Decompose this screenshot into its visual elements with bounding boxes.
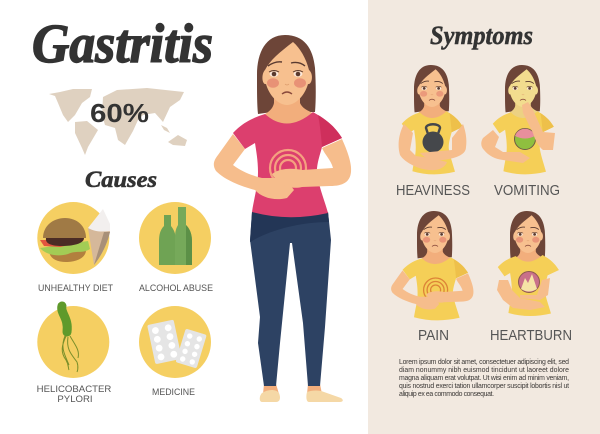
text block: lorem ipsum: quis nostrud exerci tation ullamcorper suscipit lobortis nisl ut xyxy=(399,383,569,390)
head xyxy=(257,35,316,126)
label: helicobacter pylori: PYLORI xyxy=(57,394,93,405)
stomach pain rings xyxy=(270,150,306,186)
heading: causes: Causes xyxy=(85,167,157,192)
cause: unhealthy diet xyxy=(37,202,110,274)
label: heaviness: HEAVINESS xyxy=(396,182,470,199)
title: Gastritis xyxy=(32,13,213,74)
label: pain: PAIN xyxy=(418,327,449,344)
symptom figure: vomiting xyxy=(481,65,555,174)
text block: lorem ipsum: magna aliquam erat volutpat. Ut wisi enim ad minim veniam, xyxy=(399,375,569,382)
cause: medicine xyxy=(139,306,211,378)
world map with 60% statistic: 60% xyxy=(90,98,149,128)
t-shirt xyxy=(233,112,342,217)
symptom figure: pain xyxy=(391,211,473,320)
label: alcohol abuse: ALCOHOL ABUSE xyxy=(139,283,213,294)
label: vomiting: VOMITING xyxy=(494,182,560,199)
label: helicobacter pylori: HELICOBACTER xyxy=(37,384,111,395)
panel: symptoms background xyxy=(368,0,600,434)
cause: alcohol abuse xyxy=(139,202,211,274)
label: heartburn: HEARTBURN xyxy=(490,327,572,344)
trousers xyxy=(250,212,331,386)
icon: pain rings xyxy=(424,278,448,302)
icon: kettlebell xyxy=(422,124,444,152)
label: unhealthy diet: UNHEALTHY DIET xyxy=(38,283,113,294)
text block: lorem ipsum: aliquip ex ea commodo consequat. xyxy=(399,391,494,398)
label: medicine: MEDICINE xyxy=(152,387,195,398)
icon: stomach contents xyxy=(514,128,536,150)
text block: lorem ipsum: Lorem ipsum dolor sit amet, consectetuer adipiscing elit, sed xyxy=(399,359,569,366)
symptom figure: heartburn xyxy=(497,211,559,316)
feet xyxy=(260,384,343,402)
arms xyxy=(214,134,351,199)
cause: helicobacter pylori xyxy=(37,306,109,378)
icon: flames xyxy=(518,272,540,292)
main figure: woman with stomach ache xyxy=(214,35,351,402)
symptom figure: heaviness xyxy=(399,65,466,174)
world map with 60% statistic xyxy=(49,88,187,155)
text block: lorem ipsum: diam nonummy nibh euismod tincidunt ut laoreet dolore xyxy=(399,367,569,374)
heading: symptoms: Symptoms xyxy=(430,21,533,50)
